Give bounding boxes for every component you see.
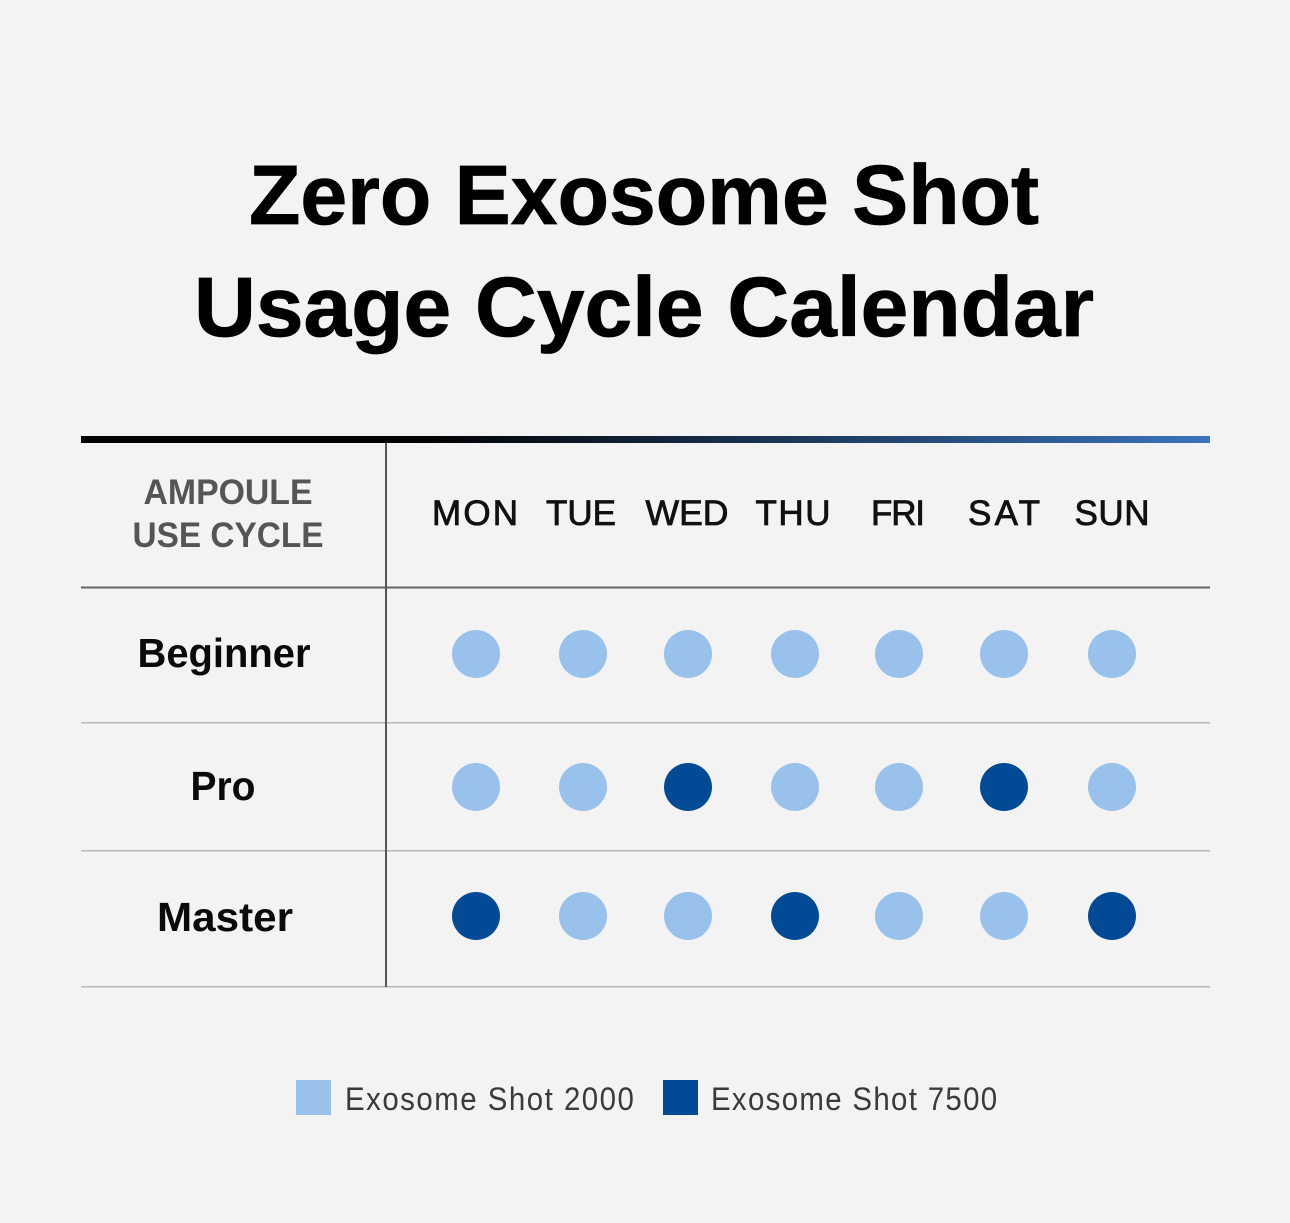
- day headers: TUE: [546, 494, 616, 533]
- row: Master dots: [452, 892, 1136, 940]
- legend: [296, 1080, 997, 1117]
- day headers: MON: [432, 494, 518, 533]
- column heading: ampoule use cycle: AMPOULE: [144, 473, 312, 512]
- title: Zero Exosome Shot: [249, 148, 1039, 242]
- title: Usage Cycle Calendar: [194, 260, 1094, 354]
- row: Beginner dots: [452, 630, 1136, 678]
- day headers: WED: [646, 494, 728, 533]
- day headers: FRI: [871, 494, 925, 533]
- column heading: ampoule use cycle: USE CYCLE: [132, 516, 324, 555]
- day headers: SAT: [968, 494, 1040, 533]
- column heading: ampoule use cycle: [132, 473, 324, 555]
- row labels: Pro: [190, 763, 256, 809]
- legend: Exosome Shot 2000: [345, 1081, 634, 1117]
- day headers: [432, 494, 1150, 533]
- row labels: [138, 630, 311, 940]
- row: Pro dots: [452, 763, 1136, 811]
- row labels: Master: [157, 894, 293, 940]
- day headers: SUN: [1074, 494, 1150, 533]
- row labels: Beginner: [138, 630, 311, 676]
- legend: Exosome Shot 7500: [711, 1081, 997, 1117]
- title: [194, 148, 1094, 354]
- table grid: [81, 436, 1210, 988]
- day headers: THU: [756, 494, 830, 533]
